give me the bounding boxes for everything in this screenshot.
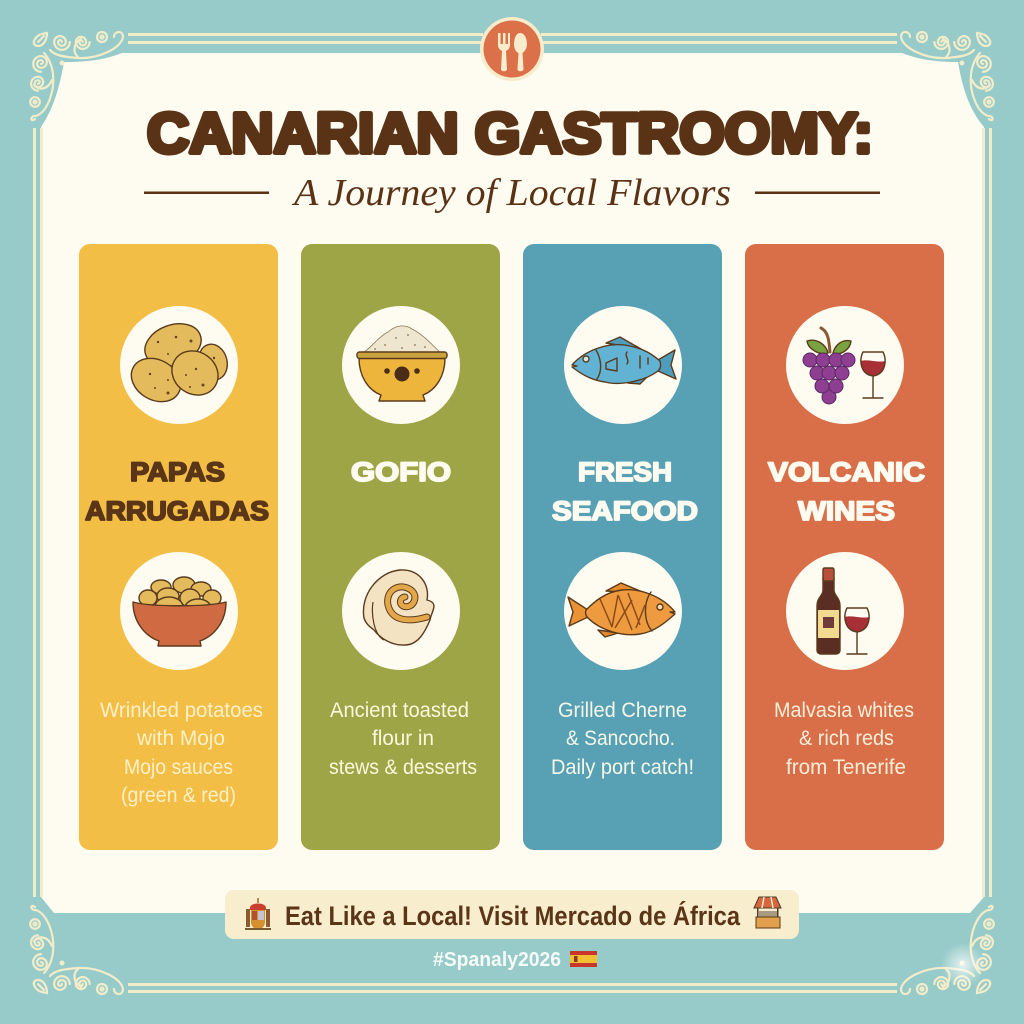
description: Papas Arrugadas: with Mojo <box>136 727 225 750</box>
heading: Volcanic Wines <box>768 457 925 526</box>
description: Gofio: Ancient toasted <box>330 699 469 722</box>
icon: bowl of potatoes <box>120 552 238 670</box>
subtitle with side rules: A Journey of Local Flavors <box>291 172 731 214</box>
ornament: top left corner <box>30 32 123 120</box>
panel: Volcanic Wines <box>745 244 944 850</box>
sparkle highlight <box>941 943 985 987</box>
icon: Spanish flag <box>570 951 597 967</box>
heading: Fresh Seafood <box>552 457 698 526</box>
heading: Fresh Seafood: FRESH <box>578 457 672 487</box>
description: Gofio: flour in <box>372 727 434 750</box>
heading: Volcanic Wines: WINES <box>798 496 895 526</box>
icon: grilled orange fish <box>564 552 682 670</box>
ornament: bottom right corner <box>901 906 994 994</box>
description: Papas Arrugadas: Mojo sauces <box>124 756 233 779</box>
description: Volcanic Wines: from Tenerife <box>786 756 906 779</box>
panel: Fresh Seafood <box>523 244 722 850</box>
description: Papas Arrugadas: Wrinkled potatoes <box>100 699 263 722</box>
icon: grapes and wine glass <box>786 306 904 424</box>
callout: visit banner: Eat Like a Local! Visit Mercado de África <box>285 900 741 931</box>
panel: Gofio <box>301 244 500 850</box>
description: Gofio: stews & desserts <box>329 756 477 779</box>
icon: fork and spoon badge <box>480 17 544 81</box>
icon: flour swirl <box>342 552 460 670</box>
panel: Papas Arrugadas <box>79 244 278 850</box>
heading: Papas Arrugadas: ARRUGADAS <box>85 496 269 526</box>
description: Fresh Seafood: & Sancocho. <box>566 727 675 750</box>
title: CANARIAN GASTROOMY: <box>147 102 873 166</box>
icon: Spanish coat of arms <box>245 898 271 930</box>
ornament: top right corner <box>901 32 994 120</box>
heading: Volcanic Wines: VOLCANIC <box>768 457 925 487</box>
panel: cream content area <box>41 53 984 913</box>
description: Fresh Seafood: Grilled Cherne <box>558 699 687 722</box>
description: Fresh Seafood: Daily port catch! <box>551 756 694 779</box>
ornament: bottom left corner <box>30 906 123 994</box>
description: Fresh Seafood <box>551 699 694 779</box>
icon: wine bottle and glass <box>786 552 904 670</box>
icon: blue fish <box>564 306 682 424</box>
heading: Fresh Seafood: SEAFOOD <box>552 496 698 526</box>
description: Papas Arrugadas <box>100 699 263 807</box>
description: Volcanic Wines: Malvasia whites <box>774 699 914 722</box>
icon: bowl of gofio flour <box>342 306 460 424</box>
callout: visit banner <box>225 890 799 939</box>
icon: market stall <box>754 897 781 928</box>
description: Volcanic Wines: & rich reds <box>799 727 894 750</box>
heading: Papas Arrugadas <box>85 457 269 526</box>
hashtag: #Spanaly2026 <box>433 949 561 971</box>
icon: potatoes <box>120 306 238 424</box>
description: Volcanic Wines <box>774 699 914 779</box>
description: Gofio <box>329 699 477 779</box>
heading: Papas Arrugadas: PAPAS <box>130 457 225 487</box>
description: Papas Arrugadas: (green & red) <box>121 784 236 807</box>
heading: Gofio: GOFIO <box>351 457 451 487</box>
